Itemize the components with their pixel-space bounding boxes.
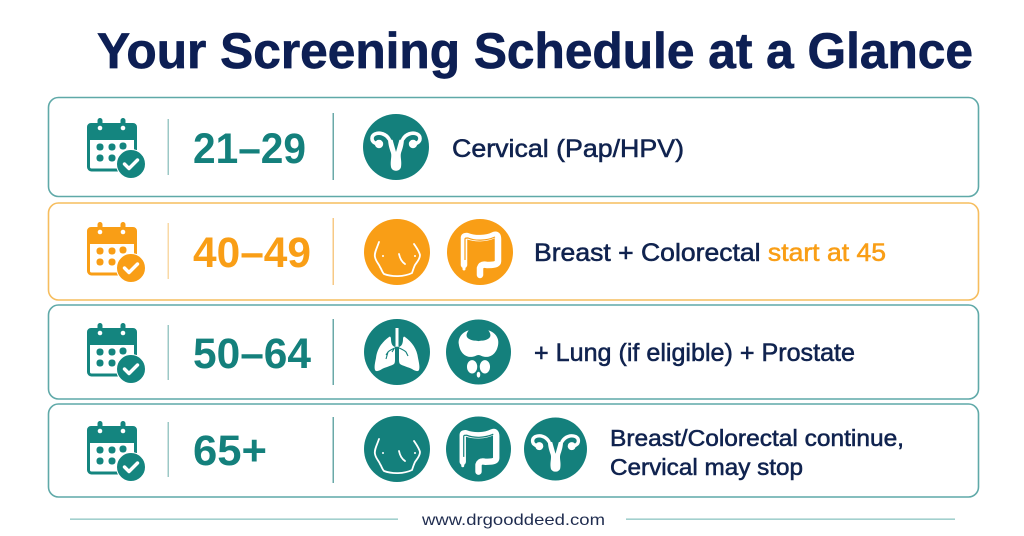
icon: calendar 40–49 — [87, 222, 146, 282]
title: Your Screening Schedule at a Glance — [97, 23, 973, 79]
panel: ages 50–64 — [48, 305, 978, 399]
icon: lungs — [364, 319, 430, 385]
icon: uterus — [524, 418, 587, 480]
icon: uterus — [363, 114, 429, 180]
panel: ages 65+ — [48, 404, 978, 497]
icon: prostate — [446, 320, 511, 384]
icon: calendar 65+ — [87, 421, 146, 482]
icon: calendar 50–64 — [87, 323, 146, 384]
screening label: continue or stop: Breast/Colorectal continue, — [610, 425, 904, 451]
panel: ages 21–29 — [48, 98, 978, 196]
screening label: cervical: Cervical (Pap/HPV) — [452, 135, 684, 163]
age range 21–29: 21–29 — [193, 125, 306, 173]
icon: calendar 21–29 — [87, 118, 146, 178]
screening label: lung and prostate: + Lung (if eligible) + Prostate — [534, 339, 855, 367]
age range 40–49: 40–49 — [193, 229, 311, 277]
age range 50–64: 50–64 — [193, 330, 311, 378]
icon: colon — [446, 416, 511, 482]
age range 65+: 65+ — [193, 427, 267, 475]
footer website: www.drgooddeed.com — [421, 512, 605, 529]
screening label: breast and colorectal: Breast + Colorectal start at 45 — [534, 239, 886, 267]
panel: ages 40–49 — [48, 203, 978, 300]
icon: colon — [447, 219, 513, 285]
icon: breast — [364, 219, 430, 285]
icon: breast — [364, 416, 430, 482]
screening label: continue or stop: Cervical may stop — [610, 454, 803, 480]
